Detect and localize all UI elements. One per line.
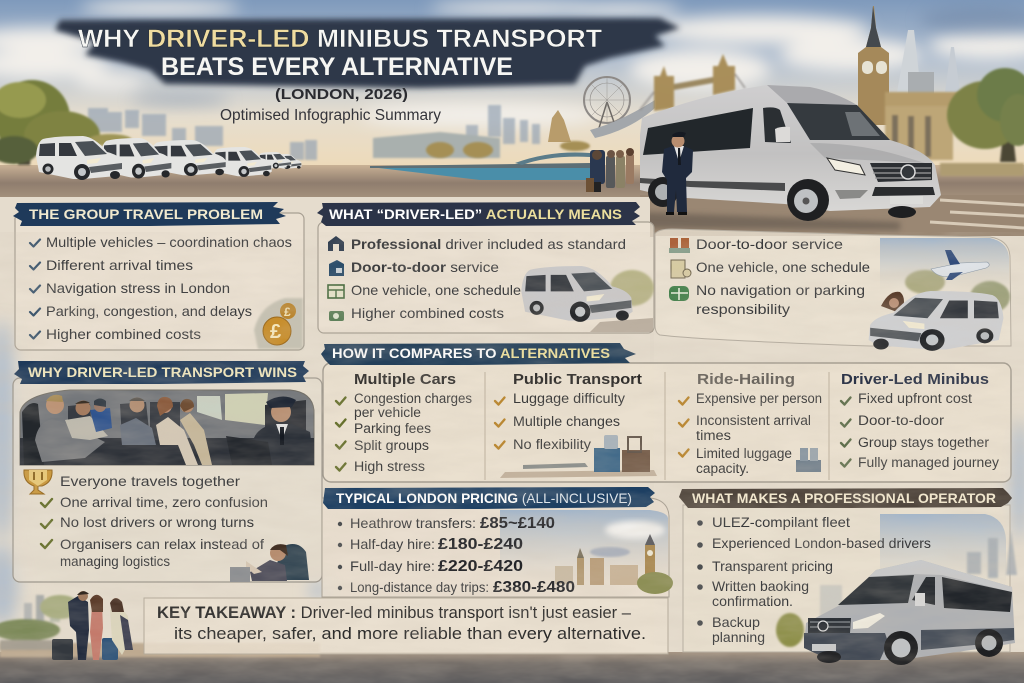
list: driver-led features continued: responsibility: [696, 301, 790, 317]
title text: BEATS EVERY ALTERNATIVE: [161, 53, 513, 81]
subtitle: [220, 86, 441, 124]
panel: what makes a professional operator: [679, 488, 1017, 652]
title banner: [55, 18, 680, 88]
checklist: driver-led benefits: managing logistics: [60, 553, 170, 569]
column: multiple cars: Congestion charges: [354, 391, 472, 406]
heading: how it compares: [321, 343, 636, 365]
list: operator qualities: ULEZ-compilant fleet: [712, 514, 850, 530]
column: multiple cars: High stress: [354, 459, 425, 474]
list: driver-led features continued: No navigation or parking: [696, 282, 865, 298]
list: driver-led features continued: Door-to-door service: [696, 236, 843, 252]
checklist: problems: Higher combined costs: [46, 326, 201, 342]
subtitle: Optimised Infographic Summary: [220, 107, 441, 124]
column: ride-hailing: Limited luggage: [696, 446, 792, 461]
callout: key takeaway: KEY TAKEAWAY : Driver-led minibus transport isn't just easier –: [157, 603, 632, 622]
illustration: group of passengers by the water: [586, 148, 634, 192]
icon: airplane: [931, 250, 989, 280]
heading: what driver-led means: [317, 202, 640, 226]
list: driver-led features: Door-to-door service: [351, 259, 499, 275]
column: driver-led minibus: Door-to-door: [858, 413, 945, 428]
title text: [78, 25, 602, 81]
driver in uniform: [662, 132, 693, 215]
column: multiple cars: Parking fees: [354, 421, 431, 436]
column: driver-led minibus: Driver-Led Minibus: [841, 371, 989, 388]
illustration: fleet of white minibuses: [36, 136, 302, 180]
illustration: passengers and driver in minibus interior: [20, 390, 314, 465]
illustration: family with luggage and park: [0, 591, 133, 660]
list: operator qualities: confirmation.: [712, 593, 793, 609]
column: public transport: No flexibility: [513, 437, 591, 452]
checklist: problems: Multiple vehicles – coordination chaos: [46, 234, 292, 250]
checklist: driver-led benefits: Everyone travels together: [60, 473, 240, 489]
list: operator qualities: Transparent pricing: [712, 558, 833, 574]
checklist: problems: Different arrival times: [46, 257, 193, 273]
London Eye: [584, 77, 630, 128]
panel: why driver-led transport wins: [13, 361, 322, 582]
sky scene: [880, 238, 1010, 313]
list: operator qualities: [697, 514, 931, 645]
illustration: silver MPV: [869, 291, 1003, 351]
list: prices: Half-day hire:: [350, 536, 435, 552]
column: driver-led minibus: [841, 371, 999, 470]
list: prices: £220-£420: [438, 558, 523, 575]
heading: why driver-led wins: [14, 361, 309, 384]
column: ride-hailing: [679, 371, 822, 476]
list: driver-led features: Higher combined costs: [351, 305, 504, 321]
list: driver-led features continued: [669, 236, 870, 317]
heading: what driver-led means: WHAT “DRIVER-LED” ACTUALLY MEANS: [329, 206, 622, 222]
list: prices: Full-day hire:: [350, 558, 435, 574]
list: prices: £85~£140: [480, 515, 555, 532]
illustration: grey Mercedes-style minibus: [804, 560, 1015, 665]
icon: pound coins: £: [284, 305, 291, 319]
panel: what driver-led actually means: [317, 202, 654, 333]
column: ride-hailing: Expensive per person: [696, 391, 822, 406]
checklist: driver-led benefits: No lost drivers or wrong turns: [60, 514, 254, 530]
illustration: relaxed organiser in seat: [230, 544, 309, 582]
list: operator qualities: planning: [712, 629, 765, 645]
checklist: driver-led benefits: One arrival time, zero confusion: [60, 494, 268, 510]
column: driver-led minibus: Group stays together: [858, 435, 990, 450]
list: driver-led features continued: One vehicle, one schedule: [696, 259, 870, 275]
illustration: neoclassical building: [885, 92, 1024, 176]
background: London skyline, river and bridges: [88, 77, 655, 180]
illustration: luggage pile: [500, 435, 657, 478]
list: operator qualities: Written baoking: [712, 578, 809, 594]
illustration: London skyline with Big Ben: [500, 510, 673, 596]
illustration: luggage stack: [796, 448, 821, 472]
heading: why driver-led wins: WHY DRIVER-LED TRANSPORT WINS: [28, 364, 297, 380]
column: public transport: Public Transport: [513, 371, 642, 388]
column: public transport: Luggage difficulty: [513, 391, 625, 406]
heading: what makes a professional operator: WHAT MAKES A PROFESSIONAL OPERATOR: [692, 490, 996, 506]
column: ride-hailing: times: [696, 428, 731, 443]
column: public transport: [495, 371, 657, 478]
panel: driver-led features continued: [655, 229, 1011, 351]
illustration: silver people carrier: [521, 266, 654, 332]
panel: the group travel problem: [13, 202, 304, 350]
icon: trophy: [24, 470, 52, 494]
heading: typical London pricing: TYPICAL LONDON PRICING (ALL-INCLUSIVE): [336, 490, 632, 506]
list: operator qualities: Experienced London-based drivers: [712, 535, 931, 551]
list: driver-led features: [328, 236, 626, 321]
list: driver-led features: Professional driver included as standard: [351, 236, 626, 252]
checklist: problems: Navigation stress in London: [46, 280, 230, 296]
sky and skyline scene: [776, 514, 1017, 647]
checklist: driver-led benefits: Organisers can relax instead of: [60, 536, 264, 552]
panel: how it compares to alternatives: [321, 343, 1011, 482]
title text: WHY DRIVER-LED MINIBUS TRANSPORT: [78, 25, 602, 53]
list: prices: £180-£240: [438, 536, 523, 553]
callout: key takeaway: its cheaper, safer, and more reliable than every alternative.: [174, 624, 646, 643]
callout: key takeaway: [144, 598, 668, 654]
heading: group travel problem: [13, 202, 286, 226]
illustration: Tower Bridge: [640, 54, 745, 111]
list: prices: [338, 515, 575, 596]
heading: how it compares: HOW IT COMPARES TO ALTERNATIVES: [332, 345, 610, 361]
icon: pound coins: [254, 298, 303, 349]
heading: typical London pricing: [323, 487, 655, 509]
heading: group travel problem: THE GROUP TRAVEL PROBLEM: [29, 206, 263, 222]
column: public transport: Multiple changes: [513, 414, 620, 429]
checklist: problems: Parking, congestion, and delays: [46, 303, 252, 319]
column: ride-hailing: Ride-Hailing: [697, 371, 795, 388]
panel: typical London pricing: [322, 487, 673, 597]
illustration: woman waving: [881, 292, 904, 312]
list: prices: Heathrow transfers:: [350, 515, 476, 531]
list: driver-led features: One vehicle, one schedule.: [351, 282, 525, 298]
checklist: driver-led benefits: [41, 473, 268, 569]
illustration: tree at right: [947, 68, 1024, 162]
column: multiple cars: per vehicle: [354, 405, 421, 420]
illustration: silver driver-led minibus: [640, 85, 941, 221]
icon: pound coins: £: [270, 321, 281, 343]
illustration: tree at left: [0, 80, 132, 165]
list: prices: £380-£480: [493, 579, 575, 596]
column: ride-hailing: capacity.: [696, 461, 749, 476]
column: multiple cars: [336, 371, 472, 474]
list: operator qualities: Backup: [712, 614, 760, 630]
column: driver-led minibus: Fixed upfront cost: [858, 391, 972, 406]
checklist: problems: [30, 234, 292, 342]
column: driver-led minibus: Fully managed journey: [858, 455, 999, 470]
subtitle: (LONDON, 2026): [275, 86, 408, 103]
column: multiple cars: Multiple Cars: [354, 371, 456, 388]
column: ride-hailing: Inconsistent arrival: [696, 413, 811, 428]
list: prices: Long-distance day trips:: [350, 579, 489, 595]
illustration: Big Ben and Shard: [858, 6, 960, 125]
column: multiple cars: Split groups: [354, 438, 429, 453]
